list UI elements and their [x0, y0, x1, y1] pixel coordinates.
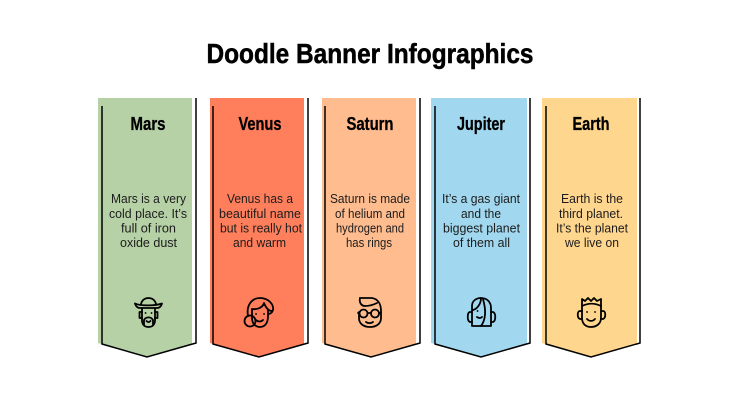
description: Earth [556, 191, 628, 250]
heading: Saturn: Saturn [346, 113, 394, 134]
description: Mars: full of iron [121, 220, 176, 236]
banner outline: Saturn [325, 98, 420, 357]
panel: Venus [210, 98, 308, 357]
description: Saturn: has rings [346, 235, 392, 250]
icon: man with spiky hair [578, 298, 605, 327]
banner shape: Mars [98, 98, 192, 357]
description: Saturn [330, 191, 410, 250]
banner outline: Mars [102, 98, 196, 357]
description: Venus: Venus has a [227, 191, 294, 206]
description: Mars [109, 191, 187, 250]
title: Doodle Banner Infographics [206, 38, 534, 69]
banner shape: Venus [210, 98, 304, 357]
banner shape: Saturn [322, 98, 416, 357]
heading: Jupiter: Jupiter [457, 113, 505, 134]
icon: woman with long hair [468, 298, 495, 326]
description: Jupiter: and the [461, 206, 501, 221]
description: Venus: but is really hot [220, 220, 302, 236]
panel: Earth [542, 98, 640, 357]
description: Earth: we live on [564, 235, 619, 250]
banner shape: Jupiter [431, 98, 527, 357]
heading: Mars: Mars [130, 113, 166, 134]
description: Jupiter: of them all [453, 235, 510, 250]
panel: Mars [98, 98, 196, 357]
panel: Jupiter [431, 98, 530, 357]
description: Earth: third planet. [559, 206, 623, 221]
panel: Saturn [322, 98, 420, 357]
banner outline: Venus [213, 98, 308, 357]
description: Jupiter [442, 191, 520, 250]
banner outline: Earth [546, 98, 640, 357]
description: Saturn: Saturn is made [330, 191, 410, 206]
description: Mars: cold place. It’s [109, 206, 187, 221]
description: Venus: and warm [233, 235, 286, 250]
description: Earth: Earth is the [561, 191, 623, 206]
description: Mars: Mars is a very [111, 191, 186, 206]
description: Saturn: hydrogen and [336, 220, 404, 236]
description: Jupiter: It’s a gas giant [442, 191, 520, 206]
description: Saturn: of helium and [335, 206, 405, 221]
banner shape: Earth [542, 98, 637, 357]
description: Jupiter: biggest planet [443, 220, 520, 236]
description: Venus: beautiful name [219, 206, 301, 221]
heading: Earth: Earth [572, 113, 610, 134]
heading: Venus: Venus [238, 113, 282, 134]
icon: man with glasses [358, 298, 381, 327]
description: Earth: It’s the planet [556, 220, 628, 236]
icon: woman with hair bun [244, 298, 273, 327]
banner outline: Jupiter [435, 98, 530, 357]
icon: man with sombrero [135, 298, 162, 327]
description: Mars: oxide dust [120, 235, 177, 250]
description: Venus [219, 191, 302, 250]
